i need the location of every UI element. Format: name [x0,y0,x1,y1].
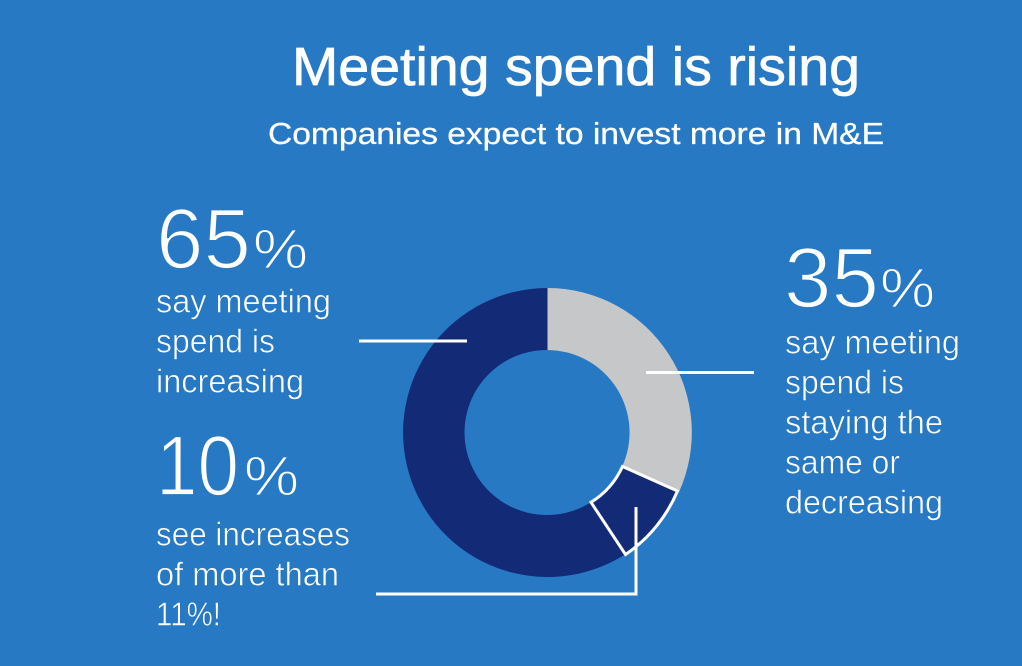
stat: 35%: decreasing [785,484,943,520]
subtitle: Companies expect to invest more in M&E [268,116,884,151]
stat: 10%: 10 [156,419,239,514]
stat: 65%: 65 [156,192,251,287]
stat: 65%: % [253,217,308,280]
stat: 35%: same or [785,444,900,480]
stat: 10%: see increases [156,516,350,552]
segment: 10% highlighted [591,466,678,554]
leader line: 35% [646,371,754,374]
stat: 35%: spend is [785,364,904,400]
stat: 10%: 11%! [156,596,221,632]
stat: 35%: staying the [785,404,943,440]
stat: 35%: 35 [784,231,879,326]
stat: 65%: say meeting [156,282,331,320]
stat: 65% [156,192,331,400]
stat: 35%: % [880,256,935,319]
segment: 35% same or decreasing [548,288,692,492]
title: Meeting spend is rising [292,37,860,97]
stat: 65%: spend is [156,322,275,360]
stat: 35% [784,231,960,520]
leader line: 65% [359,340,467,342]
stat: 10%: of more than [156,556,339,592]
donut chart [403,288,692,577]
leader line: 10% [376,507,636,594]
segment: 65% increasing [403,288,625,577]
stat: 65%: increasing [156,362,304,400]
stat: 35%: say meeting [785,324,960,360]
stat: 10%: % [244,444,299,507]
stat: 10% [156,419,350,632]
